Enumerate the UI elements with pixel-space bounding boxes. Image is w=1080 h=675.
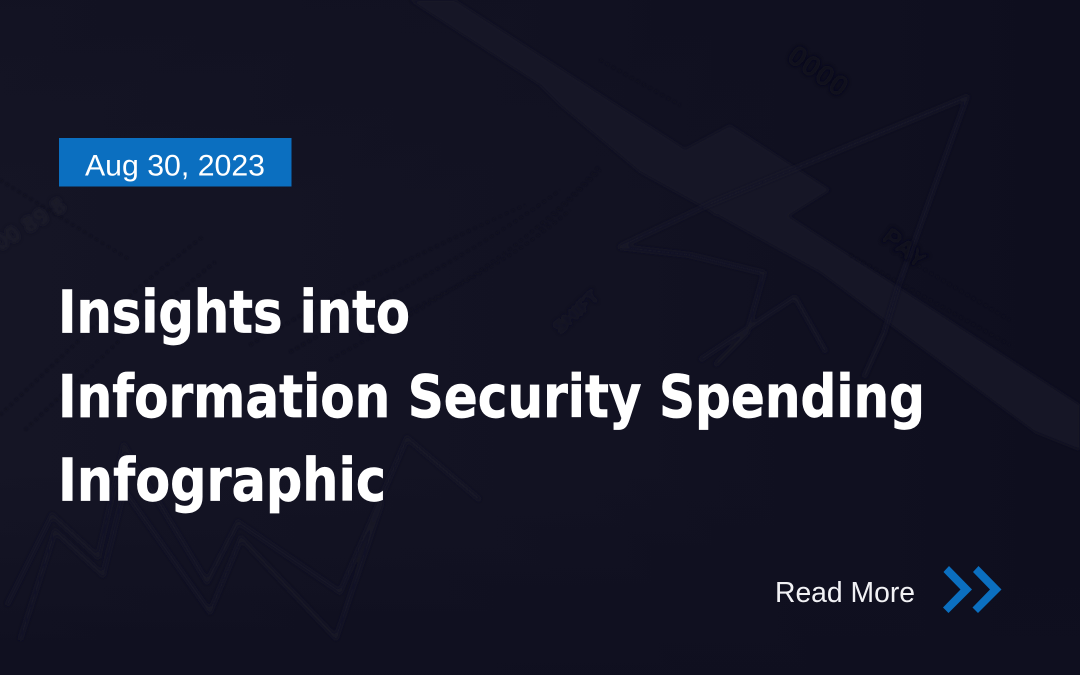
background: dark money and chart photo: PAY xyxy=(876,221,934,275)
background: dark money and chart photo: SHIFT xyxy=(549,286,604,339)
chart lines right xyxy=(619,97,967,377)
title: Information Security Spending xyxy=(58,362,925,431)
diagonal light bands xyxy=(410,0,1080,450)
read more link: Read More xyxy=(775,577,915,609)
title xyxy=(58,278,925,514)
title: Infographic xyxy=(58,446,386,514)
chart lines bottom left xyxy=(7,438,480,605)
icon: double chevron arrow xyxy=(943,566,1002,613)
banknote texture xyxy=(0,60,1010,430)
date text: Aug 30, 2023 xyxy=(85,150,265,182)
background: dark money and chart photo: 0000 xyxy=(781,39,855,104)
date badge xyxy=(59,138,292,186)
title: Insights into xyxy=(58,278,410,346)
